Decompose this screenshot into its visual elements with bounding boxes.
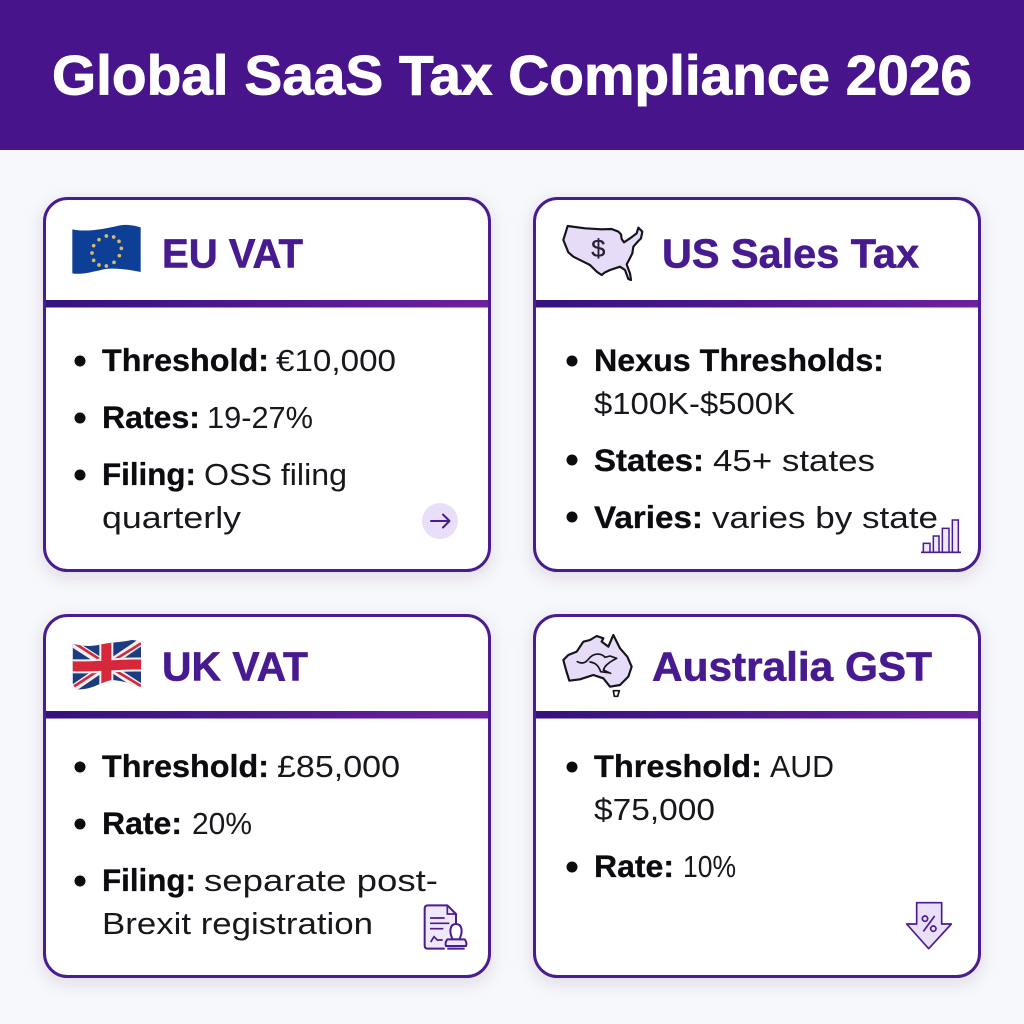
bullet: varies: Varies: <box>594 499 703 535</box>
bullet: states: 45+ states <box>713 443 875 478</box>
bullet: threshold <box>566 748 834 827</box>
bullet: filing: Brexit registration <box>102 906 373 941</box>
icon: arrow badge <box>422 503 458 539</box>
bullet: rates: 19-27% <box>207 400 313 435</box>
bullet: varies: varies by state <box>712 500 938 535</box>
icon: UK flag <box>72 640 141 690</box>
panel: US Sales Tax <box>534 198 980 570</box>
bullet: rates <box>74 399 313 435</box>
bullet: rate: Rate: <box>102 805 182 841</box>
bullet: rates: Rates: <box>102 399 200 435</box>
bullet: nexus thresholds <box>566 342 884 421</box>
bullet: states <box>566 442 875 478</box>
icon: percent down arrow <box>907 903 951 949</box>
bullet: nexus thresholds: Nexus Thresholds: <box>594 342 884 378</box>
bullet: filing: quarterly <box>102 500 242 535</box>
heading: EU VAT: EU VAT <box>162 230 303 276</box>
bullet: filing: OSS filing <box>204 457 347 492</box>
bullet: nexus thresholds: $100K-$500K <box>594 386 795 421</box>
bullet: threshold: Threshold: <box>594 748 762 784</box>
bullet: filing: Filing: <box>102 456 196 492</box>
header band <box>0 0 1024 150</box>
icon: bar chart <box>921 520 961 552</box>
bullet: threshold: $75,000 <box>594 792 715 827</box>
bullet: threshold <box>74 748 400 784</box>
bullet: rate <box>566 848 736 884</box>
bullet: filing <box>74 862 438 941</box>
bullet: threshold: Threshold: <box>102 342 269 378</box>
heading: Australia GST: Australia GST <box>652 644 932 690</box>
bullet: threshold: £85,000 <box>277 749 400 784</box>
bullet: rate: 10% <box>683 849 736 884</box>
bullet: threshold: €10,000 <box>276 343 396 378</box>
icon: US map with dollar <box>563 226 642 280</box>
bullet: threshold: Threshold: <box>102 748 269 784</box>
panel: UK VAT <box>44 616 490 976</box>
bullet: threshold <box>74 342 396 378</box>
bullet: rate: 20% <box>192 806 252 841</box>
title: Global SaaS Tax Compliance 2026 <box>52 44 972 106</box>
bullet: filing <box>74 456 347 535</box>
heading: US Sales Tax: US Sales Tax <box>662 230 919 276</box>
panel: EU VAT <box>44 198 490 570</box>
icon: EU flag <box>72 225 141 274</box>
icon: document with stamp <box>425 905 466 949</box>
bullet: filing: separate post- <box>204 863 438 898</box>
bullet: varies <box>566 499 938 535</box>
bullet: rate: Rate: <box>594 848 674 884</box>
bullet: states: States: <box>594 442 704 478</box>
bullet: filing: Filing: <box>102 862 196 898</box>
bullet: rate <box>74 805 252 841</box>
icon: Australia map with kangaroo <box>563 635 632 696</box>
heading: UK VAT: UK VAT <box>162 644 308 690</box>
panel: Australia GST <box>534 616 980 976</box>
bullet: threshold: AUD <box>770 749 834 784</box>
icon: US map with dollar: $ <box>591 235 605 263</box>
